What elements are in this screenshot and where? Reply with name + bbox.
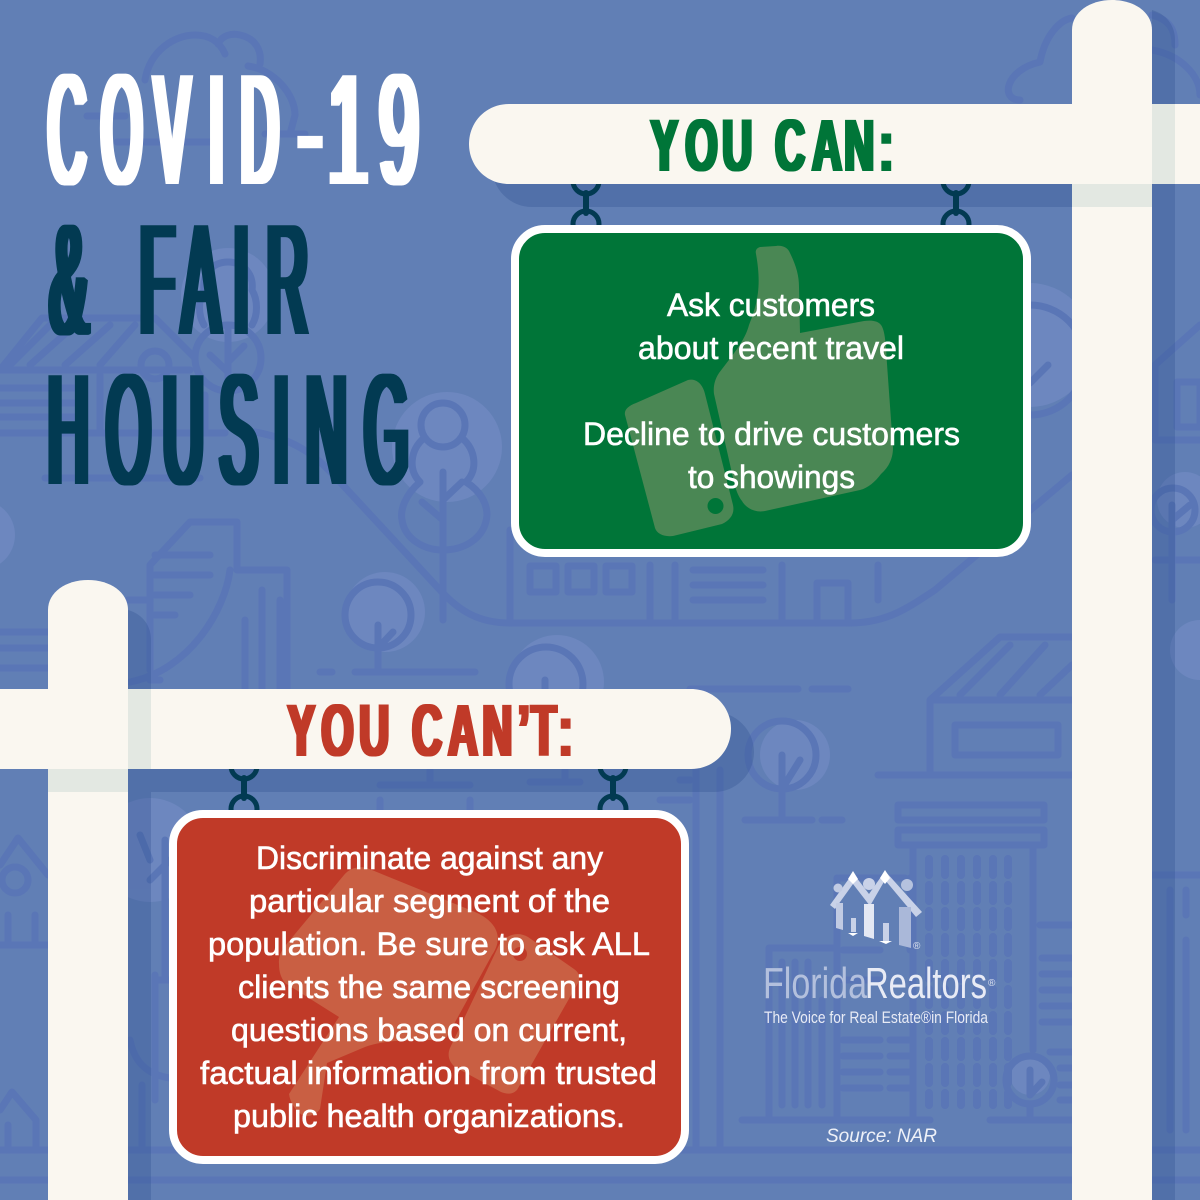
text: you can't explanation: public health organizations. — [233, 1098, 625, 1134]
logo: Florida Realtors: Realtors — [865, 959, 987, 1008]
crossbar: you can't — [0, 689, 731, 769]
post shadow overlays — [1072, 104, 1175, 207]
text: you can't explanation: population. Be sure to ask ALL — [208, 926, 650, 962]
text: you can't explanation: Discriminate against any — [256, 840, 603, 876]
text: you can't explanation: particular segment of the — [249, 883, 610, 919]
text: you can't explanation: questions based on current, — [231, 1012, 627, 1048]
tagline: The Voice for Real Estate®in Florida — [764, 1008, 988, 1027]
post: you can't — [48, 580, 128, 1200]
source note: Source: NAR — [826, 1126, 937, 1147]
text: you can list: Ask customers — [667, 287, 875, 323]
text: you can list — [583, 287, 960, 495]
crossbar: you can — [469, 104, 1200, 184]
heading: you can't: YOU CAN’T: — [288, 689, 573, 772]
icon: thumbs down — [279, 867, 579, 1116]
post shadow overlays — [48, 689, 151, 792]
post and sign: you can't — [0, 580, 754, 1200]
text: you can list: Decline to drive customers — [583, 416, 960, 452]
title: COVID-19 & Fair Housing: HOUSING — [48, 343, 409, 519]
shadow of lower post and bar — [88, 610, 754, 1200]
text: you can't explanation: factual information from trusted — [200, 1055, 657, 1091]
logo: Florida Realtors: ® — [988, 978, 996, 989]
title: COVID-19 & Fair Housing: -19 — [298, 41, 419, 218]
title: COVID-19 & Fair Housing — [48, 41, 419, 519]
chains: you can sign — [573, 168, 969, 237]
title: COVID-19 & Fair Housing: COVID — [48, 42, 278, 218]
panel: you can (green sign) — [515, 229, 1027, 553]
shadow of top post and bar — [492, 10, 1175, 1200]
text: you can't explanation: clients the same screening — [238, 969, 620, 1005]
icon: house of people — [830, 870, 922, 948]
post: you can — [1072, 0, 1152, 1200]
chains: you can't sign — [231, 753, 626, 822]
registered mark: logo icon: ® — [913, 941, 921, 952]
title: COVID-19 & Fair Housing: & FAIR — [50, 193, 308, 369]
text: you can list: to showings — [688, 459, 855, 495]
post and sign: you can — [469, 0, 1200, 1200]
text: you can't explanation — [200, 840, 657, 1134]
icon: thumbs up — [625, 246, 893, 536]
wordmark: Florida — [763, 959, 867, 1008]
text: you can list: about recent travel — [638, 330, 904, 366]
heading: you can: YOU CAN: — [651, 104, 893, 187]
logo: Florida Realtors — [763, 870, 996, 1027]
panel: you can't (red sign) — [173, 814, 685, 1160]
